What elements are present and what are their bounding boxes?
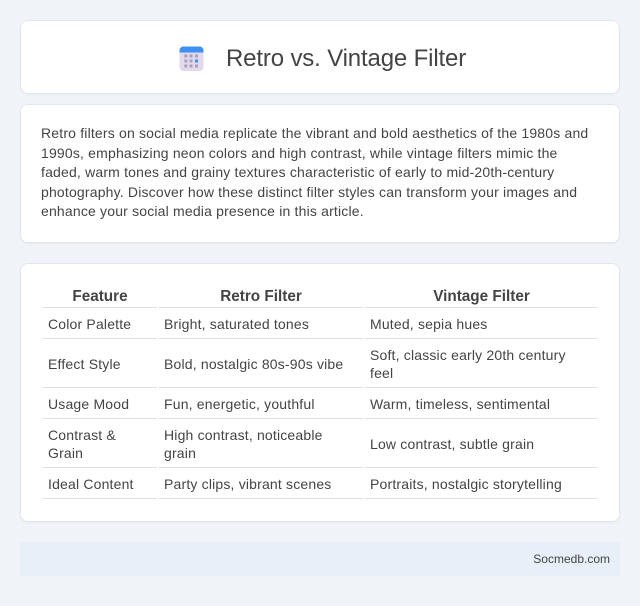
panel: intro text [20, 104, 620, 243]
row: color palette: Muted, sepia hues [370, 316, 487, 332]
row: usage mood: Fun, energetic, youthful [164, 396, 315, 412]
row: ideal content: Party clips, vibrant scenes [164, 476, 331, 492]
row: ideal content: Portraits, nostalgic storytelling [370, 476, 562, 492]
table header: Vintage Filter [433, 288, 530, 305]
row: usage mood [48, 396, 550, 412]
table header [72, 288, 530, 305]
row: ideal content [48, 476, 562, 492]
row: contrast and grain: Contrast & [48, 427, 116, 443]
intro paragraph: Retro filters on social media replicate the vibrant and bold aesthetics of the 1980s and [41, 125, 588, 141]
row: effect style: Effect Style [48, 356, 121, 372]
row: effect style [48, 347, 566, 381]
row: color palette: Bright, saturated tones [164, 316, 309, 332]
footer bar [20, 542, 620, 576]
table header: Retro Filter [220, 288, 302, 305]
row: color palette [48, 316, 487, 332]
row: effect style: Soft, classic early 20th century [370, 347, 566, 363]
intro paragraph: faded, warm tones and grainy textures characteristic of early to mid-20th-century [41, 164, 554, 180]
panel: title card [20, 20, 620, 94]
row: contrast and grain: Low contrast, subtle grain [370, 436, 534, 452]
intro paragraph [41, 125, 588, 219]
row: contrast and grain: grain [164, 445, 196, 461]
footer credit: Socmedb.com [533, 552, 610, 566]
row: contrast and grain: High contrast, noticeable [164, 427, 323, 443]
icon: calendar [180, 46, 204, 71]
table header: Feature [72, 288, 128, 305]
title: Retro vs. Vintage Filter [226, 45, 466, 72]
row: ideal content: Ideal Content [48, 476, 134, 492]
row: contrast and grain: Grain [48, 445, 83, 461]
intro paragraph: enhance your social media presence in this article. [41, 203, 364, 219]
row: usage mood: Usage Mood [48, 396, 129, 412]
panel: comparison table [20, 263, 620, 522]
row: color palette: Color Palette [48, 316, 131, 332]
intro paragraph: 1990s, emphasizing neon colors and high contrast, while vintage filters mimic the [41, 145, 558, 161]
intro paragraph: photography. Discover how these distinct filter styles can transform your images and [41, 184, 577, 200]
row: effect style: Bold, nostalgic 80s-90s vibe [164, 356, 343, 372]
row: effect style: feel [370, 365, 393, 381]
row: contrast and grain [48, 427, 534, 461]
row: usage mood: Warm, timeless, sentimental [370, 396, 550, 412]
